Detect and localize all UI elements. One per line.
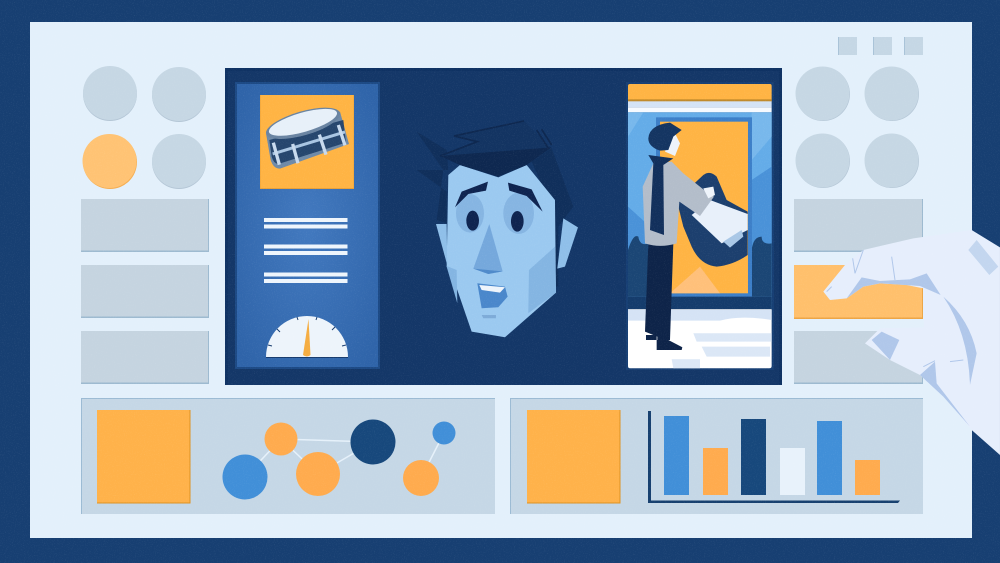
person: hand [703, 187, 715, 198]
orange square [527, 410, 620, 504]
eye sockets [456, 194, 484, 233]
panel: bottom left network [81, 398, 495, 514]
person: face [665, 133, 680, 156]
wave shapes [628, 236, 772, 297]
person: hair [648, 123, 682, 151]
window wall [628, 112, 772, 309]
person: trousers and shoes [645, 243, 673, 340]
panel: right photo card [626, 82, 774, 370]
finger shadows [847, 273, 941, 298]
paper [692, 200, 748, 243]
panel: left info card [235, 82, 380, 369]
left ear [436, 224, 447, 265]
eyes [466, 211, 479, 231]
hair back [417, 132, 573, 287]
orange top bar [628, 84, 772, 101]
icon: snare drum [263, 101, 349, 169]
illustration: hand [823, 230, 1000, 455]
panel: right circle buttons [796, 66, 919, 188]
framed picture [656, 117, 752, 300]
gauge [266, 316, 348, 358]
orange square [97, 410, 190, 504]
panel: right rectangle buttons [794, 199, 923, 384]
panel: left rectangle buttons [81, 199, 209, 384]
panel: window control squares [838, 37, 923, 55]
floor [628, 309, 772, 368]
nose [473, 224, 503, 274]
face shading [447, 247, 556, 313]
hair top [440, 121, 552, 177]
panel: left circle buttons [82, 66, 206, 189]
face shape [447, 165, 556, 337]
person: scarf [648, 155, 673, 235]
bar chart [648, 411, 900, 503]
mouth [477, 283, 508, 308]
whale shape [677, 173, 748, 267]
panel: central screen [225, 68, 782, 385]
drum thumbnail [260, 95, 354, 189]
eyebrows [455, 182, 543, 212]
text placeholder lines [264, 218, 348, 283]
illustration: worried face [417, 121, 578, 337]
network diagram [222, 420, 456, 500]
person: sweater [643, 162, 714, 246]
panel: bottom right bar chart [510, 398, 923, 514]
knuckle lines [827, 250, 963, 367]
right ear [557, 218, 578, 269]
